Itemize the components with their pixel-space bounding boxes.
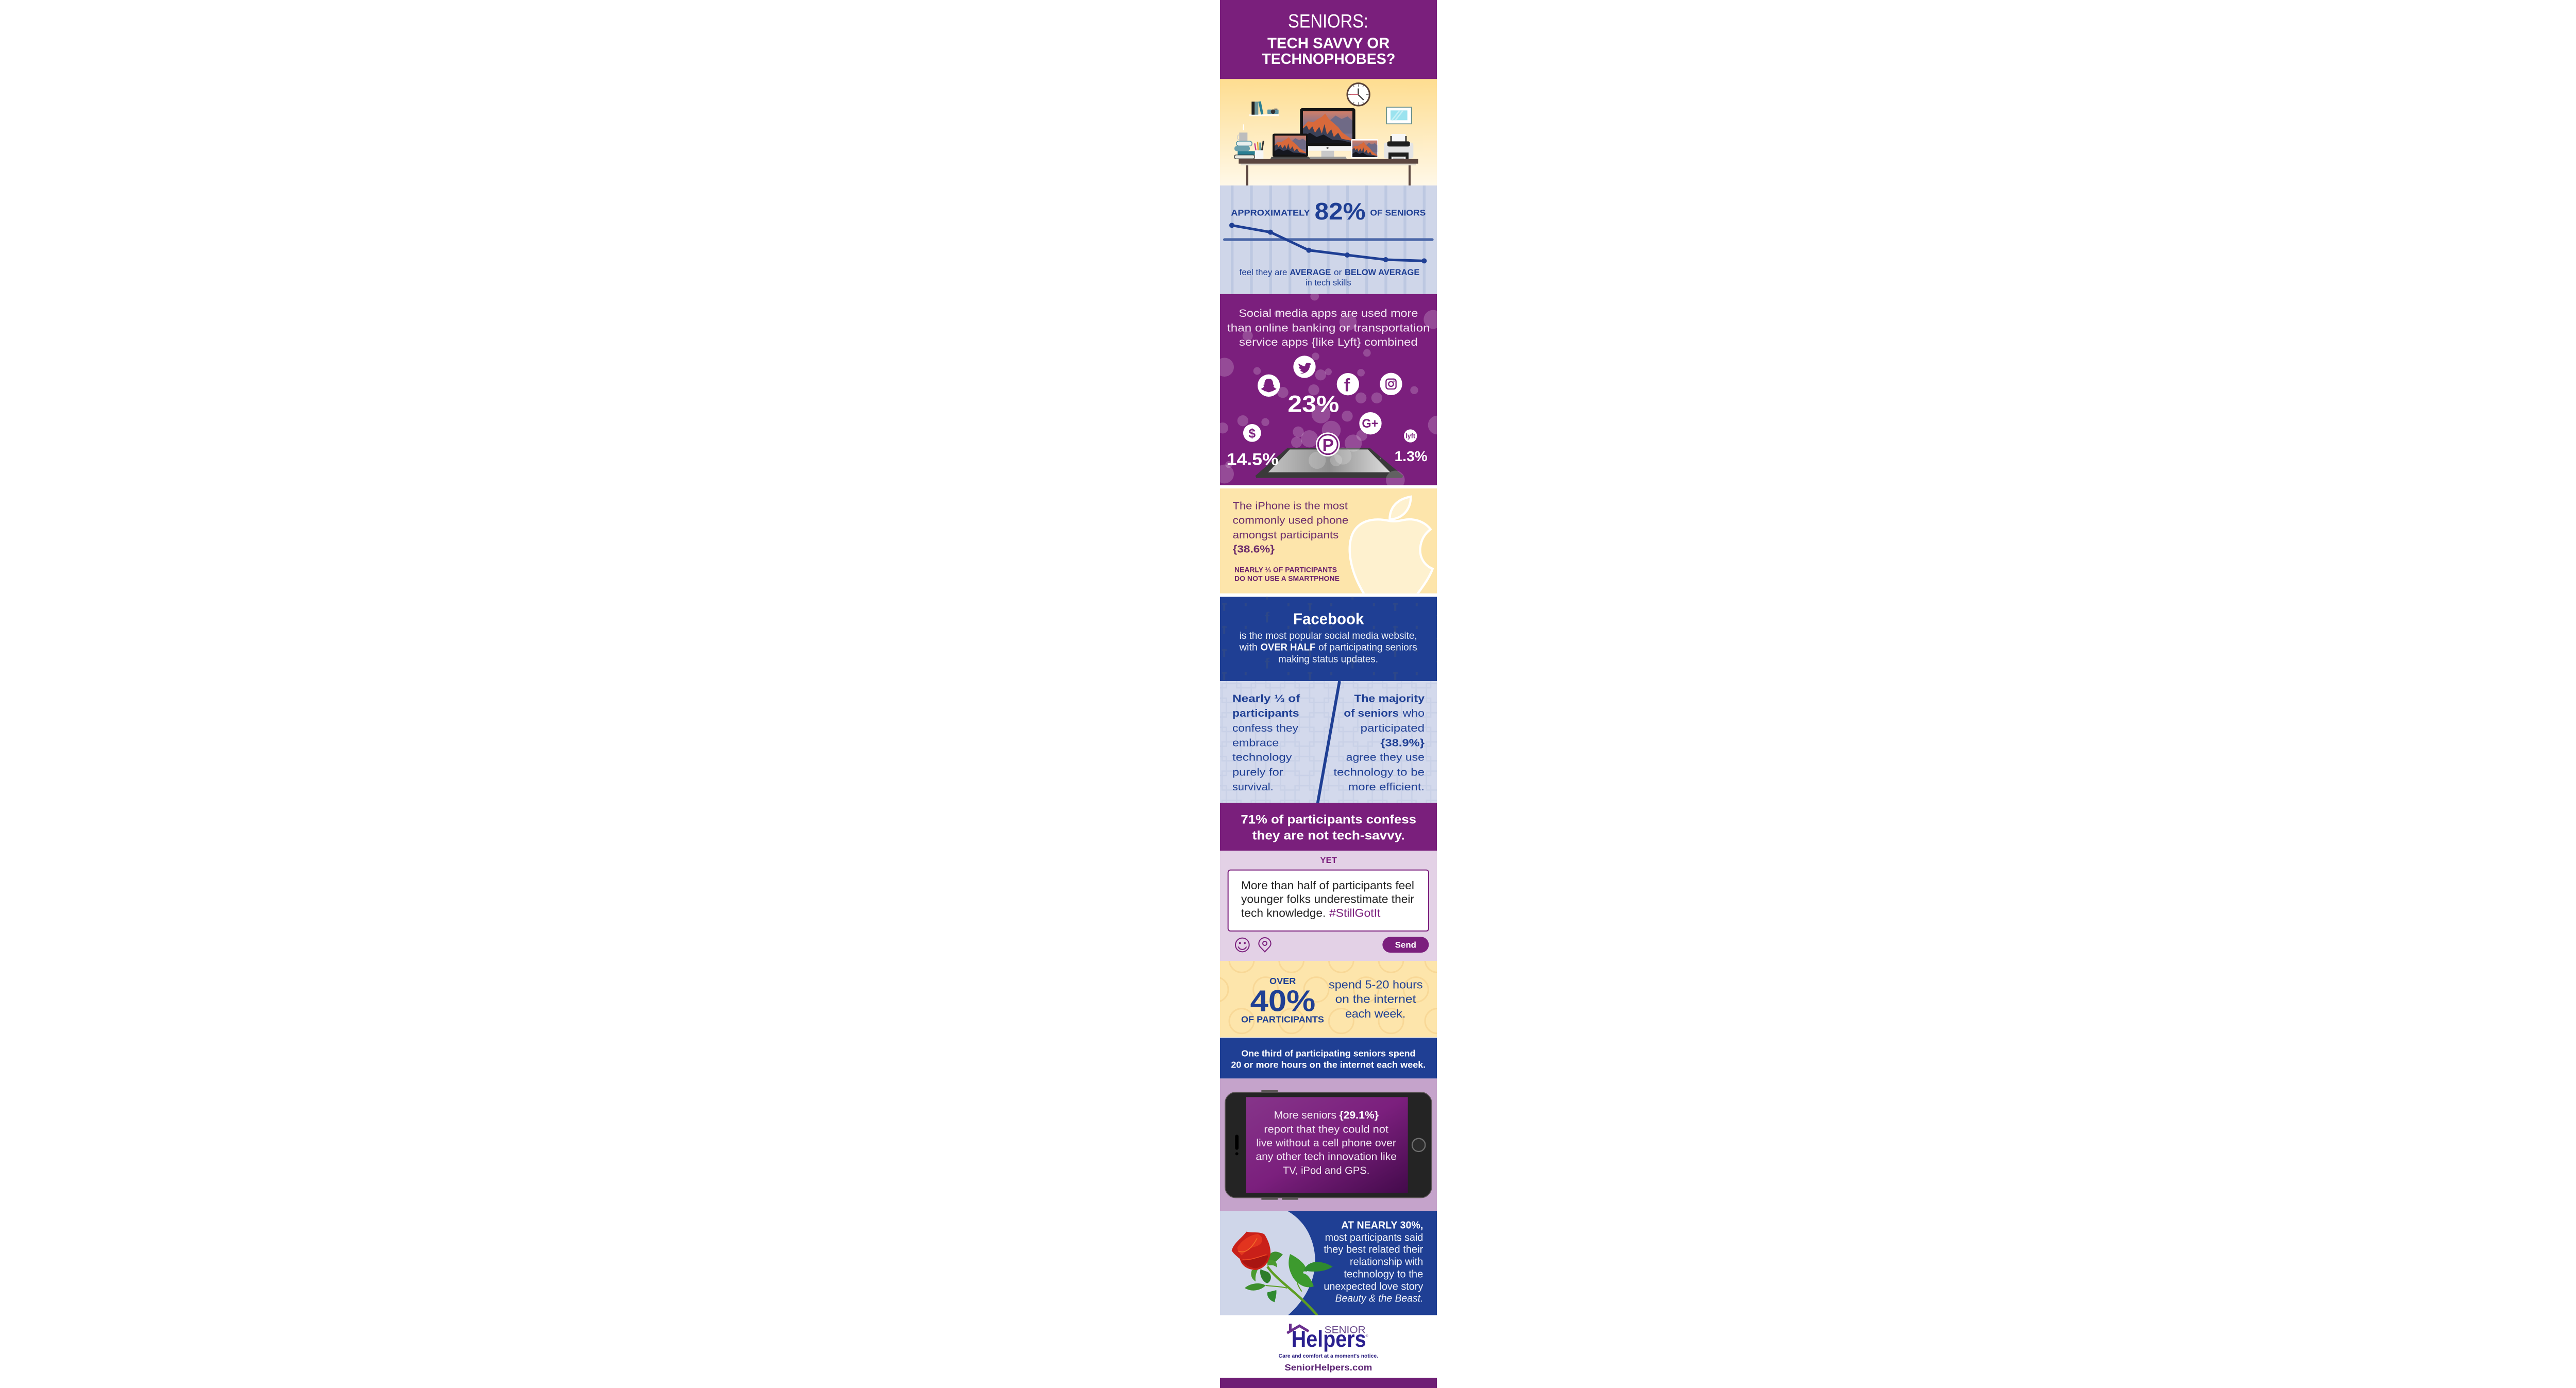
icon: apple [1350,497,1433,596]
text: iPhone share [1233,500,1348,555]
text: average or below average: in tech skills [1306,278,1351,287]
icon: shelf with books and camera [1249,101,1279,116]
icon: tablet [1351,139,1378,158]
icon: location pin [1259,938,1271,952]
message box [1228,870,1429,931]
heading: approximately 82% of seniors [1231,198,1426,225]
panel: survival versus efficiency [1220,681,1437,803]
text: cell phone: {29.1%} [1339,1110,1379,1121]
icon: laptop [1270,133,1310,159]
stat: over 40 percent of participants: OF PARTICIPANTS [1241,1014,1324,1024]
desk [1239,159,1418,185]
panel: Senior Helpers footer [1220,1315,1437,1378]
tagline: Care and comfort at a moment's notice. [1279,1353,1378,1359]
label: yet: YET [1320,855,1337,865]
heading: social media apps text: Social media apps are used more [1239,307,1418,319]
text: nearly one third: technology [1232,752,1292,764]
heading: social media apps text: than online banking or transportation [1227,321,1430,334]
text: majority of seniors: who [1402,707,1425,719]
text: no smartphone: DO NOT USE A SMARTPHONE [1234,574,1340,582]
line chart [1225,223,1432,263]
text: nearly one third: Nearly ⅓ of [1232,692,1300,704]
message box: More than half of participants feel [1241,879,1414,892]
panel: over 40 percent online [1220,961,1437,1038]
text: nearly one third: participants [1232,707,1299,719]
heading: approximately 82% of seniors: APPROXIMATELY [1231,208,1310,218]
text: majority of seniors: of seniors [1344,707,1399,719]
text: average or below average: feel they are [1240,267,1287,277]
title: TECHNOPHOBES? [1262,51,1395,67]
text: Facebook description: making status updates. [1278,654,1378,665]
icon: pinterest: P [1323,436,1334,455]
heading: social media apps text: service apps {like Lyft} combined [1239,336,1418,348]
icon: twitter [1293,356,1316,378]
stat: over 40 percent of participants: 40% [1250,985,1315,1018]
text: 5-20 hours: on the internet [1335,993,1416,1006]
text: majority of seniors: The majority [1354,692,1425,704]
text: cell phone: live without a cell phone over [1256,1138,1396,1149]
text: nearly one third [1232,692,1300,793]
text: no smartphone: NEARLY ⅓ OF PARTICIPANTS [1234,566,1337,574]
text: not tech-savvy [1241,813,1416,842]
icon: pinterest [1316,432,1340,456]
text: nearly one third: purely for [1232,766,1283,778]
text: average or below average: or [1334,267,1342,277]
panel: beauty and the beast [1220,1211,1437,1315]
tablet [1256,448,1403,478]
text: iPhone share: commonly used phone [1233,515,1348,527]
text: average or below average [1240,267,1419,287]
panel: one third banner [1220,1038,1437,1078]
icon: facebook: f [1344,376,1350,396]
footer bar [1220,1378,1437,1388]
icon: smiley [1235,938,1249,952]
text: 20 or more hours: 20 or more hours on the internet each week. [1231,1059,1426,1070]
text: beauty and the beast [1324,1219,1423,1305]
logo: Senior Helpers: SENIOR [1325,1325,1366,1335]
text: beauty and the beast: AT NEARLY 30%, [1341,1219,1423,1231]
text: Facebook description: of participating seniors [1318,642,1417,653]
website: SeniorHelpers.com [1284,1362,1372,1373]
button: send: Send [1395,940,1416,950]
icon: lyft: lyft [1405,433,1416,440]
text: iPhone share: The iPhone is the most [1233,500,1348,512]
stat: over 40 percent of participants: OVER [1269,976,1296,986]
text: beauty and the beast: most participants said [1325,1231,1423,1243]
text: 5-20 hours: each week. [1345,1007,1405,1020]
title [1262,10,1395,67]
text: nearly one third: embrace [1232,737,1279,749]
panel: desk illustration [1220,79,1437,185]
heading: approximately 82% of seniors: 82% [1315,198,1366,225]
text: nearly one third: survival. [1232,781,1274,793]
icon: facebook [1337,373,1359,396]
text: majority of seniors: {38.9%} [1380,737,1425,749]
icon: google plus [1359,412,1382,434]
icon: google plus: G+ [1362,417,1378,431]
text: not tech-savvy: 71% of participants confess [1241,813,1416,826]
icon: snapchat [1258,375,1280,397]
message box: younger folks underestimate their [1241,893,1414,906]
panel: Facebook [1220,597,1437,681]
icon: coffee cup and stacked books [1234,125,1255,159]
panel: cell phone [1220,1078,1437,1211]
text: majority of seniors: more efficient. [1348,781,1425,793]
icon: lyft [1404,429,1417,443]
text: 5-20 hours: spend 5-20 hours [1329,978,1423,991]
stat: over 40 percent of participants [1241,976,1324,1024]
text: beauty and the beast: technology to the [1344,1268,1423,1280]
text: majority of seniors: participated [1361,722,1425,734]
message box: tech knowledge. [1241,906,1326,919]
panel: iPhone [1220,488,1437,596]
icon: dollar [1243,424,1261,442]
text: average or below average: AVERAGE [1290,267,1331,277]
title: TECH SAVVY OR [1267,35,1390,52]
text: cell phone: TV, iPod and GPS. [1283,1165,1369,1176]
text: beauty and the beast: relationship with [1350,1256,1423,1268]
text: 20 or more hours: One third of participating seniors spend [1241,1048,1415,1059]
stat: 14.5 percent: 14.5% [1227,449,1279,468]
icon: phone [1225,1090,1432,1200]
panel: title header [1220,0,1437,79]
text: 20 or more hours [1231,1048,1426,1070]
logo: Senior Helpers: Helpers [1292,1327,1366,1352]
text: Facebook description: is the most popular social media website, [1240,631,1417,641]
text: iPhone share: amongst participants [1233,529,1338,541]
text: Facebook description: OVER HALF [1261,642,1316,653]
panel: 82% tech skills [1220,185,1437,294]
text: Facebook description [1239,631,1417,665]
icon: dollar: $ [1248,427,1256,441]
text: iPhone share: {38.6%} [1233,544,1275,555]
text: cell phone: any other tech innovation like [1256,1152,1397,1163]
text: majority of seniors: technology to be [1333,766,1425,778]
icon: printer [1384,134,1413,161]
icon: framed picture [1386,107,1412,124]
text: majority of seniors [1333,692,1425,793]
icon: rose [1232,1232,1333,1315]
text: beauty and the beast: they best related their [1324,1244,1423,1256]
text: cell phone: report that they could not [1264,1124,1388,1135]
icon: instagram [1380,373,1402,395]
title: SENIORS: [1288,10,1368,31]
text: not tech-savvy: they are not tech-savvy. [1252,828,1405,842]
icon: wall clock [1347,83,1369,106]
text: majority of seniors: agree they use [1346,752,1425,764]
text: average or below average: BELOW AVERAGE [1345,267,1419,277]
text: nearly one third: confess they [1232,722,1299,734]
heading: Facebook: Facebook [1293,611,1364,628]
panel: social media apps [1215,292,1447,489]
heading: approximately 82% of seniors: OF SENIORS [1370,208,1426,218]
text: 5-20 hours [1329,978,1423,1020]
text: no smartphone [1234,566,1340,582]
text: Facebook description: with [1239,642,1258,653]
icon: desktop monitor [1300,108,1355,159]
button: send [1382,937,1429,953]
text: beauty and the beast: Beauty & the Beast. [1335,1293,1423,1305]
stat: 1.3 percent: 1.3% [1395,448,1428,464]
heading: social media apps text [1227,307,1430,348]
text: cell phone [1256,1110,1397,1176]
logo: Senior Helpers: ® [1366,1334,1368,1338]
panel: message composer [1220,851,1437,961]
text: cell phone: More seniors [1274,1110,1336,1121]
icon: pencil holder [1255,141,1263,159]
text: beauty and the beast: unexpected love story [1324,1280,1423,1292]
message box: #StillGotIt [1329,906,1380,919]
panel: 71 percent banner [1220,803,1437,851]
stat: 23 percent: 23% [1287,391,1339,417]
